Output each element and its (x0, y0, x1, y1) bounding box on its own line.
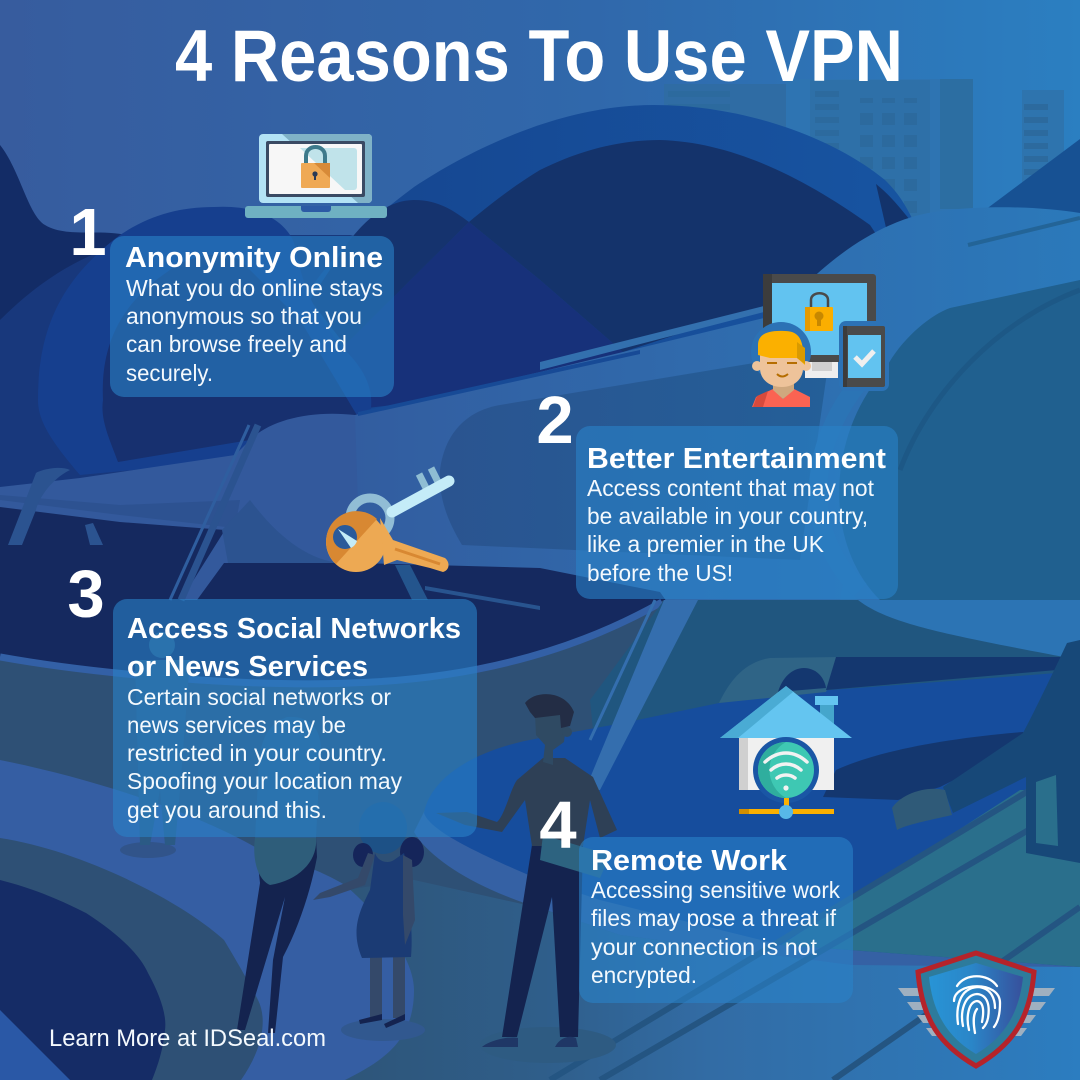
icon: devices with padlock and user (751, 274, 889, 407)
panel: access social networks: or News Services (127, 651, 368, 683)
panel: access social networks: restricted in your country. (127, 740, 387, 766)
panel: anonymity online: anonymous so that you (126, 303, 362, 329)
panel: remote work: files may pose a threat if (591, 905, 836, 931)
person: woman with bag (237, 717, 321, 1033)
panel: better entertainment (576, 426, 898, 599)
panel: better entertainment: before the US! (587, 560, 733, 586)
panel: access social networks: get you around this. (127, 797, 327, 823)
title: 4 Reasons To Use VPN (175, 16, 903, 97)
panel: access social networks (113, 599, 477, 837)
panel: better entertainment: like a premier in the UK (587, 531, 824, 557)
number 2: 2 (536, 383, 574, 458)
panel: access social networks: Access Social Networks (127, 613, 461, 645)
lake outer band (414, 800, 1080, 985)
panel: anonymity online (110, 236, 394, 397)
background person (120, 632, 190, 858)
icon: laptop with padlock (245, 134, 387, 218)
icon: keys (326, 468, 449, 572)
dark navy blob (0, 880, 165, 1080)
teal floor panel (781, 790, 1080, 967)
panel: access social networks: news services may be (127, 712, 346, 738)
panel: better entertainment: Better Entertainment (587, 443, 886, 475)
person: girl in dress (313, 802, 425, 1041)
city buildings (664, 79, 1064, 225)
panel: remote work: Accessing sensitive work (591, 877, 840, 903)
telescope body (250, 207, 1080, 650)
panel: access social networks: Certain social networks or (127, 684, 391, 710)
panel: anonymity online: can browse freely and (126, 331, 347, 357)
left telescope barrel (0, 414, 360, 600)
panel: better entertainment: be available in your country, (587, 503, 868, 529)
panel: remote work: Remote Work (591, 845, 788, 877)
panel: access social networks: Spoofing your location may (127, 768, 402, 794)
lake (424, 640, 1080, 967)
number 1: 1 (69, 195, 107, 270)
right jacket (943, 640, 1080, 863)
logo: fingerprint shield with wings (898, 953, 1055, 1066)
icon: house with wifi (720, 686, 852, 819)
panel: remote work (579, 837, 853, 1003)
diagonal rails (550, 790, 1080, 1080)
light strut (585, 600, 698, 790)
number 3: 3 (67, 557, 105, 632)
lower scene (0, 600, 1080, 1080)
panel: remote work: your connection is not (591, 934, 817, 960)
winding path (0, 760, 414, 1080)
number 4: 4 (539, 788, 577, 863)
panel: remote work: encrypted. (591, 962, 697, 988)
panel: anonymity online: Anonymity Online (125, 242, 383, 274)
footer link text: Learn More at IDSeal.com (49, 1025, 326, 1052)
telescope stand (8, 468, 70, 545)
panel: anonymity online: What you do online stays (126, 275, 383, 301)
person: man with folder (436, 694, 617, 1063)
panel: better entertainment: Access content that may not (587, 475, 874, 501)
blue ring (38, 207, 371, 475)
floor (345, 880, 1080, 1080)
panel: anonymity online: securely. (126, 360, 213, 386)
